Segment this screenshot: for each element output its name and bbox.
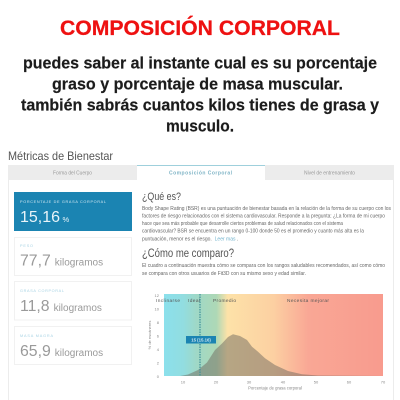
card: masa magra: [14, 326, 132, 364]
y axis labels: 2: [157, 360, 160, 366]
tooltip: [186, 336, 216, 344]
tab: forma del cuerpo: Forma del Cuerpo: [53, 170, 92, 176]
card: grasa corporal: [14, 282, 132, 320]
card: grasa corporal: 11,8 kilogramos: [20, 298, 102, 315]
dashboard heading: Métricas de Bienestar: [8, 149, 113, 163]
text block: cómo me comparo: [142, 263, 385, 277]
x axis labels: [181, 380, 386, 384]
x axis labels: 40: [281, 380, 286, 384]
tab: composición corporal (active): [137, 165, 265, 180]
text block: qué es: cardiovascular? BSR se encuentra en un rango 0-100 donde 50 es el promedio y cuanto más alta es la: [142, 228, 364, 234]
card: peso: PESO: [20, 244, 33, 248]
y axis labels: 6: [157, 334, 160, 338]
card: grasa corporal: GRASA CORPORAL: [20, 289, 64, 293]
intro text block: puedes saber al instante cual es su porcentaje: [23, 54, 377, 72]
y axis title: % de escáneres: [147, 321, 152, 349]
distribution curve: [180, 334, 383, 376]
card: porcentaje de grasa corporal: 15,16 %: [20, 209, 70, 226]
text block: qué es: puntuación, menor es el riesgo. Leer mas .: [142, 236, 238, 242]
intro text block: musculo.: [166, 116, 234, 136]
intro text block: graso y porcentaje de masa muscular.: [52, 74, 343, 94]
text block: qué es: hace que sea más probable que desarrolle ciertos problemas de salud relacionados con el sistema: [142, 221, 343, 227]
text block: cómo me comparo: El cuadro a continuación muestra cómo se compara con los rangos saludables recomendados, así como cómo: [142, 263, 385, 269]
card: masa magra: 65,9 kilogramos: [20, 343, 103, 360]
y axis labels: 12: [155, 293, 160, 298]
x axis labels: 10: [181, 380, 186, 384]
card: masa magra: MASA MAGRA: [20, 334, 53, 338]
tab: forma del cuerpo: [8, 165, 137, 180]
x axis labels: 60: [347, 380, 352, 384]
intro text block: [21, 54, 380, 136]
chart zones background: [164, 294, 383, 376]
dashed marker at user value: [199, 294, 201, 376]
x axis labels: 20: [214, 380, 219, 384]
y axis labels: [155, 293, 160, 379]
tab: composición corporal (active): Composición Corporal: [169, 170, 233, 176]
text block: qué es: [142, 206, 391, 242]
card: porcentaje de grasa corporal: [14, 192, 132, 231]
y axis labels: 4: [157, 347, 160, 352]
text block: cómo me comparo: se compara con otros usuarios de Fit3D con su mismo sexo y edad similar.: [142, 271, 306, 277]
intro text block: también sabrás cuantos kilos tienes de grasa y: [21, 96, 380, 114]
x axis labels: 70: [381, 380, 386, 384]
heading: cómo me comparo: ¿Cómo me comparo?: [142, 248, 234, 260]
chart: body fat distribution: [147, 293, 386, 390]
tab: nivel de entrenamiento: Nivel de entrenamiento: [304, 170, 355, 176]
tooltip: 15 (15.16): [191, 338, 211, 342]
dashboard panel: [8, 165, 394, 400]
y axis labels: 10: [155, 306, 160, 312]
text block: qué es: factores de riesgo relacionados con el sistema cardiovascular. Responde a la pregunta: ¿La forma de mi cuerpo: [142, 214, 385, 220]
title: COMPOSICIÓN CORPORAL: [60, 16, 340, 40]
text block: qué es: Body Shape Rating (BSR) es una puntuación de bienestar basada en la relación de la forma de su cuerpo con los: [142, 206, 391, 212]
card: porcentaje de grasa corporal: PORCENTAJE DE GRASA CORPORAL: [20, 200, 106, 204]
card: peso: 77,7 kilogramos: [20, 252, 103, 270]
tab: nivel de entrenamiento: [265, 165, 394, 180]
zone labels: Inclinarse: [156, 298, 180, 304]
card: peso: [14, 238, 132, 276]
y axis labels: 0: [157, 374, 160, 379]
heading: qué es: ¿Qué es?: [142, 191, 181, 203]
x axis labels: 50: [314, 380, 319, 384]
x axis title: Porcentaje de grasa corporal: [248, 386, 302, 390]
y axis labels: 8: [157, 320, 160, 325]
zone labels: Ideal: [188, 298, 200, 304]
zone labels: Necesita mejorar: [287, 298, 329, 304]
zone labels: [156, 298, 329, 304]
x axis labels: 30: [247, 380, 252, 384]
zone labels: Promedio: [213, 298, 236, 304]
